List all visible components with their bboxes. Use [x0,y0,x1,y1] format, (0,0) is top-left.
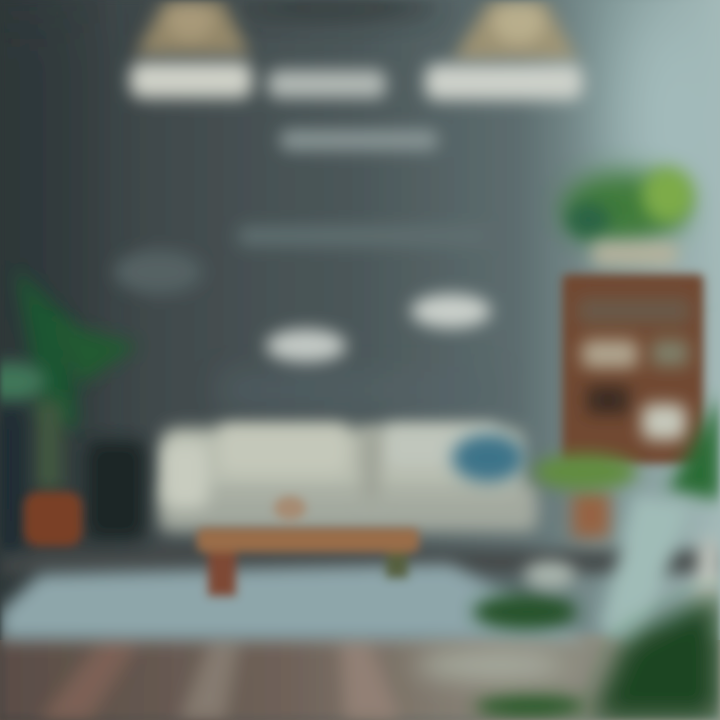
blurred cloud label: center [266,329,346,363]
blue cushion [452,434,524,482]
terracotta pot [24,492,82,546]
blurred text line [238,226,488,246]
left plant [0,268,146,550]
wooden shelf [562,274,704,464]
blurred cloud label: right [411,294,491,328]
blurred faint label [232,378,324,402]
pendant lamp: left [135,0,250,55]
blurred cloud label: left faint [114,250,202,294]
pendant lamp: right [452,0,578,60]
floor [0,550,720,720]
blurred subtitle [280,130,438,150]
rug [0,564,590,640]
blurred headline [130,62,583,100]
foreground plant [415,395,720,720]
sofa [158,424,538,532]
coffee table [197,496,419,596]
dark vase [86,440,146,540]
shelf plant [563,167,694,266]
